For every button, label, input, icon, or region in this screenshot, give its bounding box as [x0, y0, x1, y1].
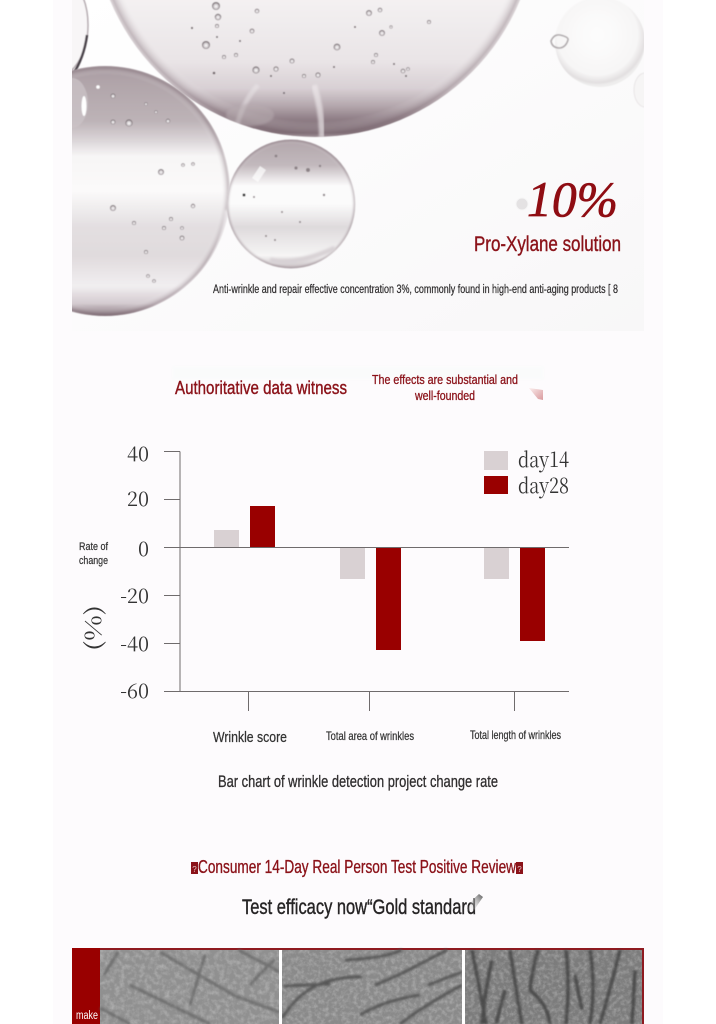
subheading: effects note — [372, 372, 518, 403]
icon: pen mark — [467, 894, 483, 912]
axis title: rate of change — [79, 541, 109, 567]
icon: pink fold — [529, 388, 543, 400]
bars: total area of wrinkles — [340, 548, 401, 650]
bar chart — [77, 438, 569, 746]
photo: skin two — [282, 950, 462, 1024]
y-axis labels: -60 — [120, 675, 149, 704]
bubble: left large — [72, 65, 230, 317]
bubble: large top — [93, 0, 537, 137]
bars: wrinkle score — [214, 506, 275, 547]
legend: day28 — [518, 470, 569, 500]
label tab — [72, 948, 100, 1024]
y-axis labels: 20 — [127, 483, 149, 512]
axis unit: percent: (%) — [77, 605, 108, 651]
bubble: top right — [550, 10, 644, 108]
heading: consumer test review: Consumer 14-Day Real Person Test Positive Review — [198, 856, 516, 877]
axis title: rate of change: change — [79, 555, 108, 567]
y-axis labels: 0 — [138, 533, 149, 562]
bubble: small at upper left edge — [72, 0, 90, 71]
droplet beside the percentage — [516, 198, 528, 210]
photo: skin three — [465, 950, 642, 1024]
category labels: Total length of wrinkles — [470, 728, 561, 742]
photo: skin one — [100, 950, 279, 1024]
subheading: effects note: well-founded — [414, 388, 475, 403]
heading: Authoritative data witness: Authoritative data witness — [175, 378, 347, 398]
legend: day14 — [518, 444, 569, 474]
panel: hero with bubbles — [72, 0, 644, 317]
heading: Pro-Xylane solution: Pro-Xylane solution — [474, 233, 621, 256]
heading: consumer test review: ? — [192, 865, 197, 874]
legend — [484, 444, 569, 500]
bubble: small centre — [226, 140, 356, 268]
y-axis labels: 40 — [127, 438, 149, 467]
category labels: Wrinkle score — [213, 729, 287, 746]
category labels: Total area of wrinkles — [326, 729, 414, 743]
heading: Authoritative data witness — [172, 366, 544, 398]
chart axes — [164, 452, 569, 711]
label: make: make — [76, 1010, 98, 1022]
category labels — [213, 728, 561, 746]
bars: total length of wrinkles — [484, 548, 545, 641]
stat: 10 percent: 10% — [527, 171, 618, 227]
chart caption: Bar chart of wrinkle detection project change rate — [218, 773, 498, 791]
heading: consumer test review: ? — [517, 865, 522, 874]
y-axis labels — [120, 438, 149, 704]
photo frame — [72, 948, 644, 1024]
y-axis labels: -20 — [120, 580, 149, 609]
subheading: test efficacy: Test efficacy now“Gold standard — [242, 896, 476, 919]
axis title: rate of change: Rate of — [79, 541, 109, 553]
subheading: effects note: The effects are substantial and — [372, 372, 518, 387]
panel: skin comparison photos — [72, 948, 644, 1024]
photo dividers — [280, 950, 464, 1024]
y-axis labels: -40 — [120, 628, 149, 657]
